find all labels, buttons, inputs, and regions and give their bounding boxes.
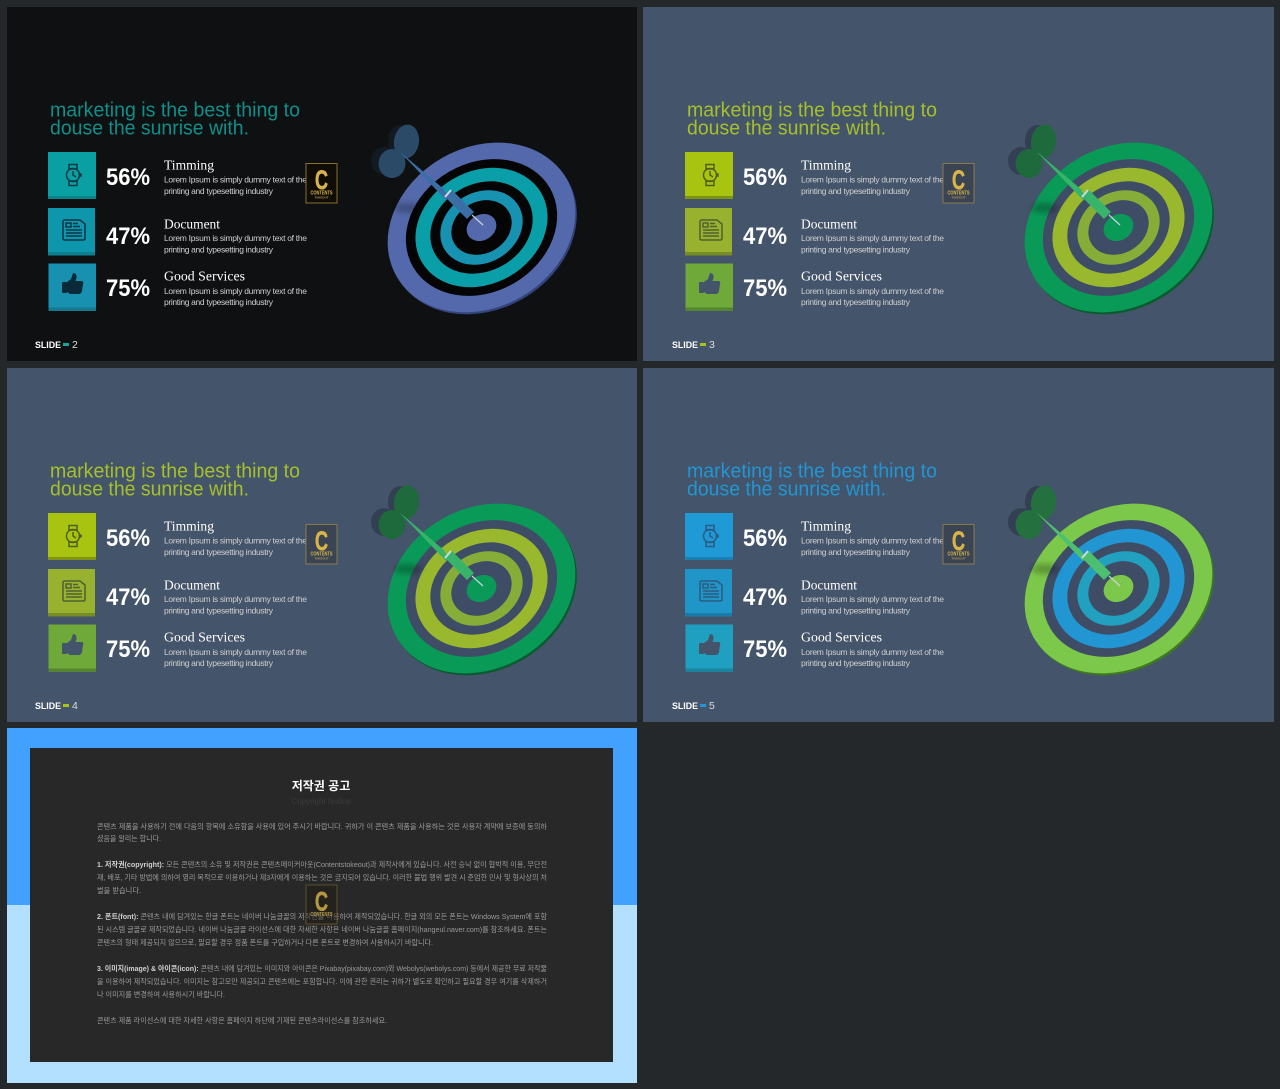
item: Document: printing and typesetting industry [801,244,911,254]
item: Document: Lorem Ipsum is simply dummy text of the [164,233,307,243]
item: Timming: Lorem Ipsum is simply dummy text of the [164,536,307,546]
logo badge: CONTENTS [948,190,970,196]
heading: douse the sunrise with. [50,478,249,500]
slide number: SLIDE [35,701,61,711]
section 3: image and icon: 3. 이미지(image) & 아이콘(icon): 콘텐츠 내에 담겨있는 이미지와 아이콘은 Pixabay(pixabay.com)와 Webolys(webolys.com) 등에서 제공한 무료 저작물 [97,963,547,973]
slide number: SLIDE [672,701,698,711]
item: Document: Lorem Ipsum is simply dummy text of the [801,594,944,604]
dartboard [357,470,608,709]
logo badge: TAKEOUT [314,196,329,200]
slide number [672,339,715,351]
item: Document [48,208,307,256]
slide number: 4 [72,700,78,712]
copyright subtitle: Copyright Notice [291,797,351,806]
item: Timming: 56% [743,525,787,552]
slide number [672,700,715,712]
slide number [35,700,78,712]
item: Good Services [48,624,307,672]
item: Timming: 56% [106,525,150,552]
logo badge: CONTENTS [310,912,333,918]
heading: douse the sunrise with. [687,478,886,500]
item: Good Services: 75% [743,636,787,663]
logo badge: CONTENTS [310,552,333,558]
intro text [97,821,547,843]
logo badge: CONTENTS [310,190,333,196]
item: Document: 47% [743,584,787,611]
heading [687,460,937,500]
logo badge: C [315,886,328,916]
item: Good Services: Lorem Ipsum is simply dummy text of the [164,286,307,296]
item: Good Services: 75% [106,275,150,302]
heading: marketing is the best thing to [50,460,300,482]
item: Document: Lorem Ipsum is simply dummy text of the [164,594,307,604]
item: Good Services [48,264,307,311]
item: Timming: Timming [801,518,851,533]
slide number: 3 [709,339,715,351]
item: Good Services: printing and typesetting industry [164,658,274,668]
heading [687,100,937,139]
item: Document: Lorem Ipsum is simply dummy text of the [801,233,944,243]
item: Timming [685,513,944,560]
slide number: SLIDE [35,340,61,350]
logo badge [943,164,974,203]
section 1: copyright: 1. 저작권(copyright): 모든 콘텐츠의 소유 및 저작권은 콘텐츠메이커아웃(Contentstokeout)과 제작사에게 있습니다. 사전 승낙 없이 협박적 이용, 무단전 [97,859,547,869]
item: Good Services: Lorem Ipsum is simply dummy text of the [164,647,307,657]
heading: marketing is the best thing to [687,100,937,122]
logo badge [943,524,974,564]
section 3: image and icon: 나 이미지를 변경하여 사용하시기 바랍니다. [97,989,225,999]
item: Good Services: Lorem Ipsum is simply dummy text of the [801,647,944,657]
dartboard [994,109,1245,348]
section 2: font: 2. 폰트(font): 콘텐츠 내에 담겨있는 한글 폰트는 네이버 나눔글꼴의 저작권을 이용하여 제작되었습니다. 한글 외의 모든 폰트는 Windows System에 포함 [97,911,547,921]
logo badge: C [315,165,328,195]
logo badge: TAKEOUT [314,556,329,560]
item: Document [48,569,307,616]
item: Document: 47% [106,223,150,250]
panel: copyright notice [7,728,637,1083]
section 2: font: 콘텐츠의 형태 제공되지 않으므로, 필요할 경우 정품 폰트를 구입하거나 다른 폰트로 변경하여 사용하시기 바랍니다. [97,937,433,947]
section 1: copyright: 벌을 받습니다. [97,885,141,895]
section 1: copyright [97,859,547,895]
item: Good Services: Good Services [801,268,882,283]
slide number: 5 [709,700,715,712]
dartboard [994,470,1245,709]
logo badge [306,524,337,564]
logo badge: TAKEOUT [952,196,966,200]
item: Timming: Lorem Ipsum is simply dummy text of the [164,174,307,184]
item: Timming: printing and typesetting industry [801,547,911,557]
item: Good Services: Lorem Ipsum is simply dummy text of the [801,286,944,296]
item: Timming: 56% [743,164,787,191]
panel: slide 4 [7,368,637,722]
closing note: 콘텐츠 제품 라이선스에 대한 자세한 사항은 홈페이지 하단에 기재된 콘텐츠라이선스를 참조하세요. [97,1015,387,1025]
item: Document [685,569,944,616]
item: Document: Document [164,216,220,231]
item: Timming [48,152,307,199]
item: Timming: Lorem Ipsum is simply dummy text of the [801,174,944,184]
item: Good Services [686,624,944,672]
item: Document: Document [801,216,857,231]
item: Good Services: Good Services [164,268,245,283]
heading: marketing is the best thing to [687,460,937,482]
item: Timming: Timming [801,157,851,172]
item: Timming: 56% [106,164,150,191]
heading [50,460,300,500]
panel: slide 3 [643,7,1274,361]
logo badge: C [952,526,965,556]
logo badge [306,164,337,203]
item: Good Services: 75% [743,275,787,302]
item: Good Services: 75% [106,636,150,663]
item: Timming: printing and typesetting industry [164,186,274,196]
dartboard [357,109,608,348]
section 2: font: 된 시스템 글꼴로 제작되었습니다. 네이버 나눔글꼴 라이선스에 대한 자세한 사항은 네이버 나눔글꼴 홈페이지(hangeul.naver.com)를 참조하세요. 폰트는 [97,924,547,934]
item: Good Services: Good Services [164,629,245,644]
panel: slide 2 [7,7,637,361]
section 3: image and icon [97,963,547,999]
item: Document: printing and typesetting industry [801,606,911,616]
item: Good Services: printing and typesetting industry [801,658,911,668]
section 3: image and icon: 을 이용하여 제작되었습니다. 이미지는 참고모만 제공되고 콘텐츠에는 포함합니다. 이에 관한 권리는 귀하가 별도로 확인하고 필요할 경우 여기를 삭제하거 [97,976,547,986]
heading: douse the sunrise with. [50,117,249,139]
heading [50,100,300,139]
item: Timming: printing and typesetting industry [801,186,911,196]
slide number: 2 [72,339,78,351]
copyright title: 저작권 공고 [292,778,350,793]
section 2: font [97,911,547,947]
logo badge: C [315,526,328,556]
item: Timming: printing and typesetting industry [164,547,274,557]
item: Timming: Lorem Ipsum is simply dummy text of the [801,536,944,546]
item: Document: 47% [743,223,787,250]
item: Timming: Timming [164,157,214,172]
item: Document: Document [164,577,220,592]
logo badge [306,885,337,924]
logo badge: C [952,165,965,195]
item: Document: 47% [106,584,150,611]
panel: slide 5 [643,368,1274,722]
section 1: copyright: 재, 배포, 기타 방법에 의하여 영리 목적으로 이용하거나 제3자에게 이용하는 것은 금지되어 있습니다. 이러한 불법 행위 발견 시 준엄한 민사 및 형사상의 처 [97,872,547,882]
item: Document: Document [801,577,857,592]
heading: marketing is the best thing to [50,100,300,122]
intro text: 콘텐츠 제품을 사용하기 전에 다음의 항목에 소유함을 사용에 있어 주시기 바랍니다. 귀하가 이 콘텐츠 제품을 사용하는 것은 사용자 계약에 보증에 동의하 [97,821,547,831]
logo badge: TAKEOUT [952,556,966,560]
item: Good Services: Good Services [801,629,882,644]
item: Timming: Timming [164,518,214,533]
item: Good Services: printing and typesetting industry [801,297,911,307]
logo badge: CONTENTS [948,552,970,558]
intro text: 셨음을 알리는 합니다. [97,834,161,843]
slide number: SLIDE [672,340,698,350]
heading: douse the sunrise with. [687,117,886,139]
item: Timming [685,152,944,199]
item: Document: printing and typesetting industry [164,606,274,616]
slide number [35,339,78,351]
item: Document [685,208,944,256]
item: Good Services [686,264,944,311]
item: Good Services: printing and typesetting industry [164,297,274,307]
item: Document: printing and typesetting industry [164,244,274,254]
item: Timming [48,513,307,560]
